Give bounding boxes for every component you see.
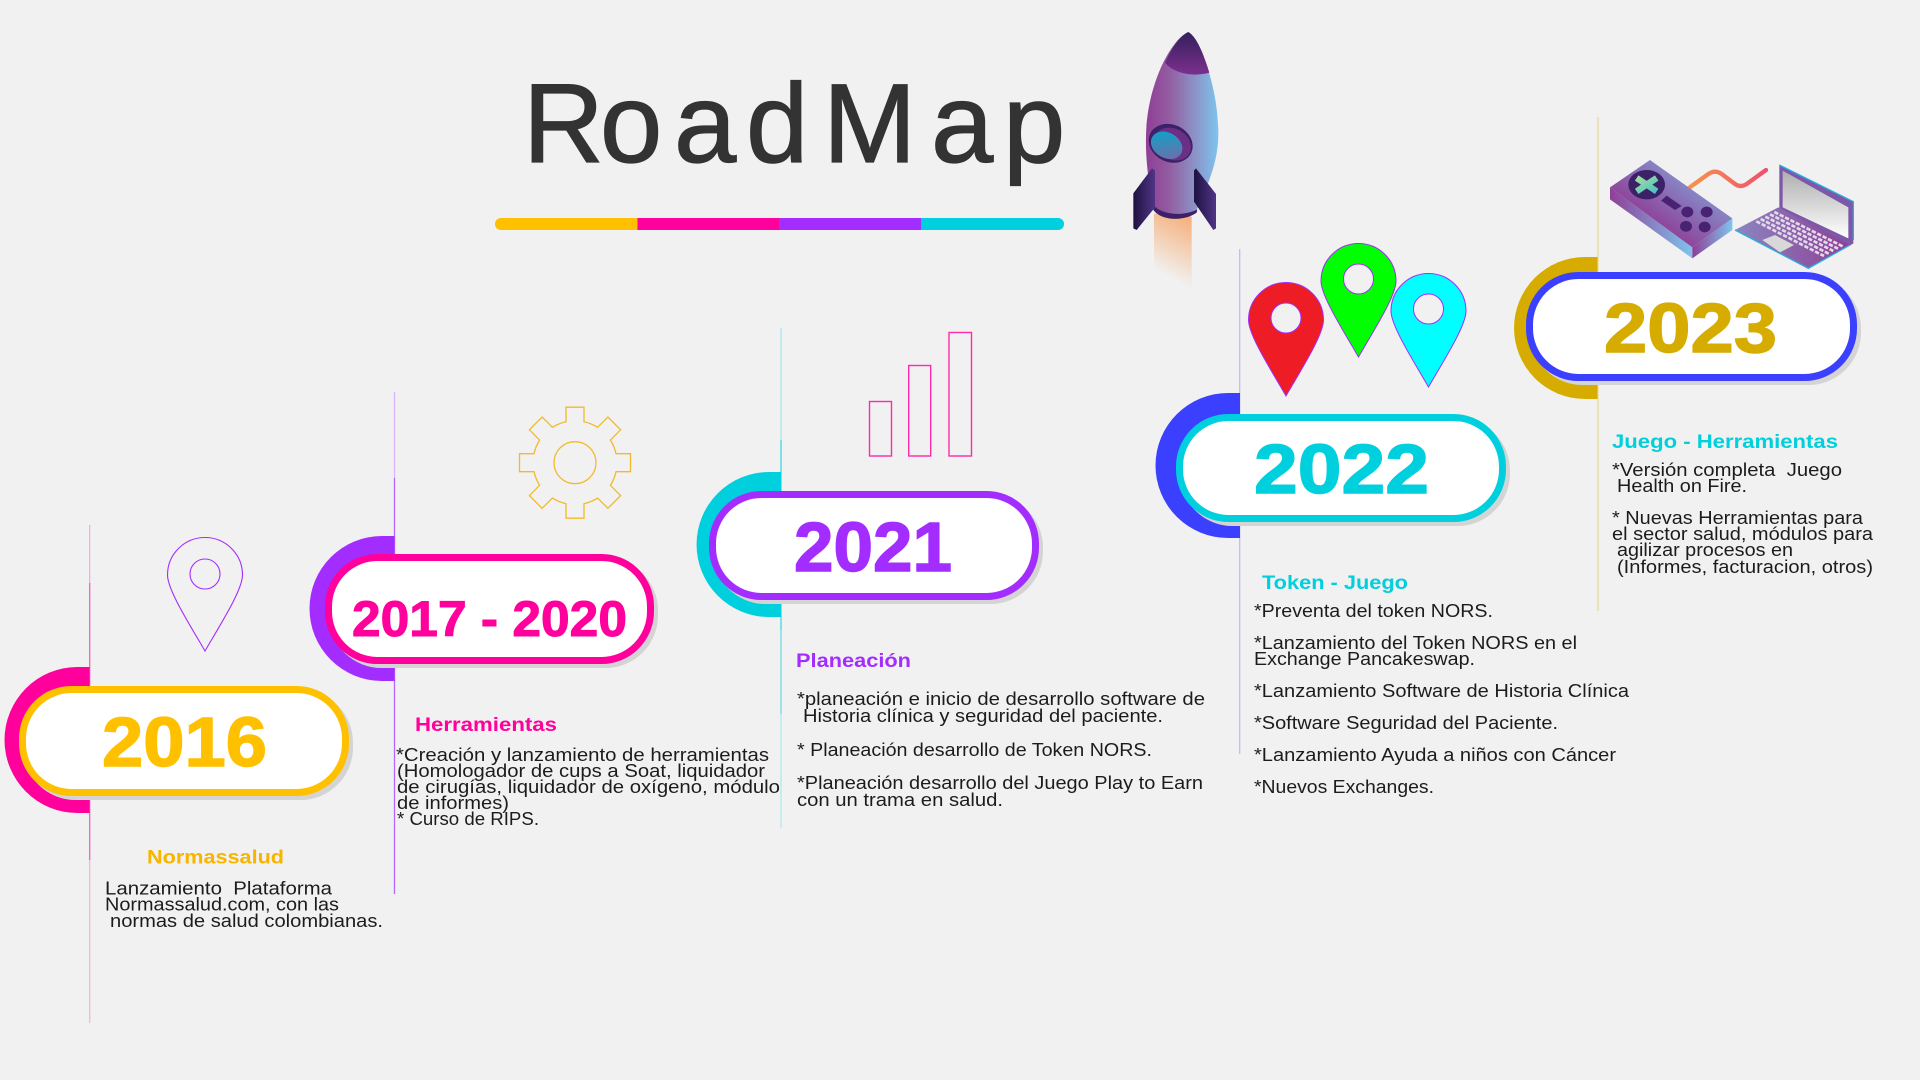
text block 2017 - 2020: * Curso de RIPS. <box>397 809 539 829</box>
icon: game controller and laptop <box>1610 160 1853 268</box>
icon: rocket <box>1133 32 1218 290</box>
text block 2023: (Informes, facturacion, otros) <box>1617 557 1873 577</box>
text block 2017 - 2020: *Creación y lanzamiento de herramientas <box>396 745 769 765</box>
text block 2023 <box>1612 460 1874 577</box>
year pill 2021 <box>712 494 1040 600</box>
text block 2023: Health on Fire. <box>1617 476 1747 496</box>
text block 2017 - 2020 <box>396 745 780 829</box>
panel: 2017 - 2020 <box>310 392 780 894</box>
year tab 2021 <box>697 472 781 617</box>
text block 2022: *Software Seguridad del Paciente. <box>1254 713 1558 733</box>
pin: green <box>1321 244 1396 357</box>
year pill 2021: 2021 <box>794 508 952 586</box>
text block 2022: *Lanzamiento Ayuda a niños con Cáncer <box>1254 745 1616 765</box>
timeline line 2017 <box>394 392 396 894</box>
text block 2017 - 2020: (Homologador de cups a Soat, liquidador <box>397 761 765 781</box>
timeline line 2023 <box>1597 117 1599 611</box>
text block 2021: *Planeación desarrollo del Juego Play to Earn <box>797 773 1203 793</box>
year pill 2023: 2023 <box>1604 289 1777 367</box>
text block 2021 <box>797 689 1205 810</box>
text block 2016: Normassalud.com, con las <box>105 894 339 914</box>
year tab 2022 <box>1156 393 1240 538</box>
icon: gear <box>520 407 630 518</box>
timeline line 2016 <box>89 525 91 1023</box>
text block 2023: el sector salud, módulos para <box>1612 524 1874 544</box>
text block 2022: *Lanzamiento Software de Historia Clínica <box>1254 681 1630 701</box>
title underline colour bar <box>495 218 1064 230</box>
year pill 2023 <box>1530 276 1858 382</box>
text block 2022: *Nuevos Exchanges. <box>1254 777 1434 797</box>
text block 2017 - 2020: de informes) <box>397 793 509 813</box>
text block 2021: Historia clínica y seguridad del paciente. <box>803 706 1163 726</box>
icon: laptop <box>1735 165 1853 268</box>
text block 2022: *Lanzamiento del Token NORS en el <box>1254 633 1577 653</box>
panel: 2023 <box>1514 117 1874 611</box>
year pill 2016: 2016 <box>102 703 267 781</box>
heading: Planeación: Planeación <box>796 651 911 672</box>
panel: 2022 <box>1156 244 1630 797</box>
year pill 2022 <box>1180 418 1506 522</box>
timeline line 2021 <box>780 328 782 828</box>
year pill 2017 - 2020 <box>328 558 654 664</box>
pin: cyan <box>1391 274 1466 387</box>
text block 2023: agilizar procesos en <box>1617 540 1793 560</box>
icon: three location pins <box>1248 244 1466 396</box>
icon: location pin outline <box>168 538 242 651</box>
year tab 2017 <box>310 536 394 681</box>
text block 2022: Exchange Pancakeswap. <box>1254 649 1475 669</box>
year pill 2016 <box>22 690 350 796</box>
heading: Juego - Herramientas: Juego - Herramientas <box>1612 432 1838 453</box>
year pill 2022: 2022 <box>1254 430 1429 508</box>
icon: bar chart outline <box>870 332 972 456</box>
text block 2016: normas de salud colombianas. <box>110 911 383 931</box>
year tab 2016 <box>4 667 90 813</box>
icon: cord <box>1688 170 1766 188</box>
heading: Herramientas: Herramientas <box>415 715 557 736</box>
heading: Token - Juego: Token - Juego <box>1262 573 1408 594</box>
text block 2021: con un trama en salud. <box>797 790 1003 810</box>
text block 2021: *planeación e inicio de desarrollo software de <box>797 689 1205 709</box>
title: RoadMap <box>523 61 1065 186</box>
text block 2022: *Preventa del token NORS. <box>1254 601 1493 621</box>
year pill 2017 - 2020: 2017 - 2020 <box>352 591 627 647</box>
panel: 2021 <box>697 328 1205 828</box>
timeline line 2022 <box>1239 249 1241 754</box>
text block 2017 - 2020: de cirugías, liquidador de oxígeno, módulo <box>397 777 780 797</box>
text block 2023: * Nuevas Herramientas para <box>1612 508 1864 528</box>
text block 2016 <box>105 878 383 931</box>
text block 2023: *Versión completa Juego <box>1612 460 1842 480</box>
text block 2016: Lanzamiento Plataforma <box>105 878 333 898</box>
panel: 2016 <box>4 525 383 1023</box>
pin: red <box>1248 282 1324 396</box>
text block 2021: * Planeación desarrollo de Token NORS. <box>797 740 1152 760</box>
icon: game controller <box>1610 160 1732 258</box>
year tab 2023 <box>1514 257 1598 399</box>
text block 2022 <box>1254 601 1630 797</box>
heading: Normassalud: Normassalud <box>147 848 284 868</box>
